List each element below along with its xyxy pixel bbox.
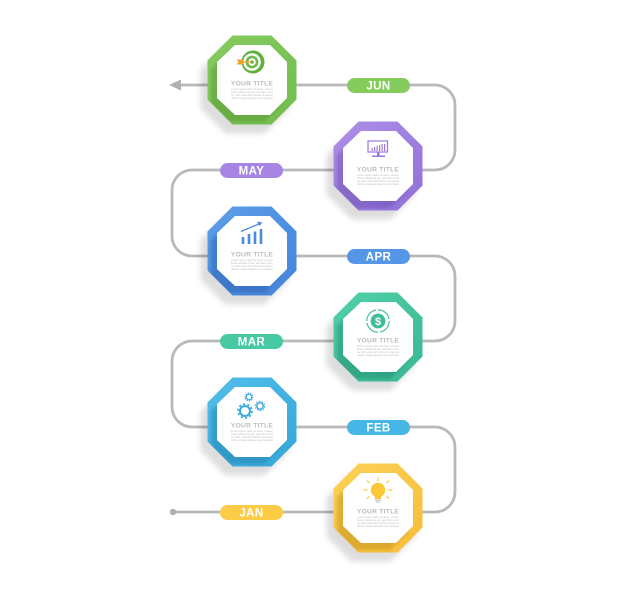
body text: Lorem ipsum dolor sit amet, consec xyxy=(357,173,400,177)
body text xyxy=(357,515,400,528)
label: JAN xyxy=(220,505,283,520)
step: JAN xyxy=(326,464,422,562)
label: MAY xyxy=(220,163,283,178)
timeline path xyxy=(169,80,455,515)
label: JUN: JUN xyxy=(366,80,391,92)
body text: Lorem ipsum dolor sit amet, consec xyxy=(357,515,400,519)
label: MAR: MAR xyxy=(238,336,265,348)
arrow head xyxy=(169,80,181,90)
icon: target xyxy=(236,50,264,74)
title: YOUR TITLE xyxy=(357,166,399,174)
step: MAY xyxy=(326,122,422,220)
label: FEB: FEB xyxy=(366,422,391,434)
label: MAR xyxy=(220,334,283,349)
body text: dolore magna aliquam erat volutpat xyxy=(231,438,273,442)
body text: tetuer adipiscing elit, sed diam nonu xyxy=(357,518,400,522)
body text: tetuer adipiscing elit, sed diam nonu xyxy=(357,176,400,180)
label: APR: APR xyxy=(366,252,392,264)
step: JUN xyxy=(200,36,296,134)
icon: dollar coin: $ xyxy=(375,316,381,328)
body text: my nibh euismod tincidunt ut laoreet xyxy=(357,179,399,183)
body text xyxy=(357,173,400,186)
label: JAN: JAN xyxy=(239,508,264,520)
body text xyxy=(357,344,400,357)
body text: my nibh euismod tincidunt ut laoreet xyxy=(231,264,273,268)
label: APR xyxy=(347,249,410,264)
body text: Lorem ipsum dolor sit amet, consec xyxy=(231,258,274,262)
body text: dolore magna aliquam erat volutpat xyxy=(357,353,399,357)
body text: my nibh euismod tincidunt ut laoreet xyxy=(231,93,273,97)
icon: light bulb xyxy=(364,477,392,502)
title: YOUR TITLE xyxy=(231,422,273,430)
body text: tetuer adipiscing elit, sed diam nonu xyxy=(231,261,274,265)
body text: my nibh euismod tincidunt ut laoreet xyxy=(357,350,399,354)
body text: my nibh euismod tincidunt ut laoreet xyxy=(231,435,273,439)
body text: tetuer adipiscing elit, sed diam nonu xyxy=(357,347,400,351)
body text: dolore magna aliquam erat volutpat xyxy=(231,267,273,271)
body text: dolore magna aliquam erat volutpat xyxy=(231,96,273,100)
icon: monitor xyxy=(368,141,388,157)
body text: dolore magna aliquam erat volutpat xyxy=(357,524,399,528)
title: YOUR TITLE xyxy=(231,80,273,88)
title: YOUR TITLE xyxy=(357,338,399,344)
body text: tetuer adipiscing elit, sed diam nonu xyxy=(231,432,274,436)
body text xyxy=(231,258,274,271)
icon: bar chart xyxy=(241,222,262,244)
body text: tetuer adipiscing elit, sed diam nonu xyxy=(231,90,274,94)
title: YOUR TITLE xyxy=(231,252,273,258)
step: FEB xyxy=(200,378,296,476)
step: MAR xyxy=(326,292,422,390)
body text: Lorem ipsum dolor sit amet, consec xyxy=(357,344,400,348)
start dot xyxy=(170,509,176,515)
body text xyxy=(231,429,274,442)
body text: my nibh euismod tincidunt ut laoreet xyxy=(357,521,399,525)
body text: dolore magna aliquam erat volutpat xyxy=(357,182,399,186)
step: APR xyxy=(200,206,296,304)
body text: Lorem ipsum dolor sit amet, consec xyxy=(231,429,274,433)
label: MAY: MAY xyxy=(239,166,264,178)
body text: Lorem ipsum dolor sit amet, consec xyxy=(231,87,274,91)
icon: gears xyxy=(238,393,265,418)
label: FEB xyxy=(347,420,410,435)
label: JUN xyxy=(347,78,410,93)
title: YOUR TITLE xyxy=(357,508,399,516)
body text xyxy=(231,87,274,100)
